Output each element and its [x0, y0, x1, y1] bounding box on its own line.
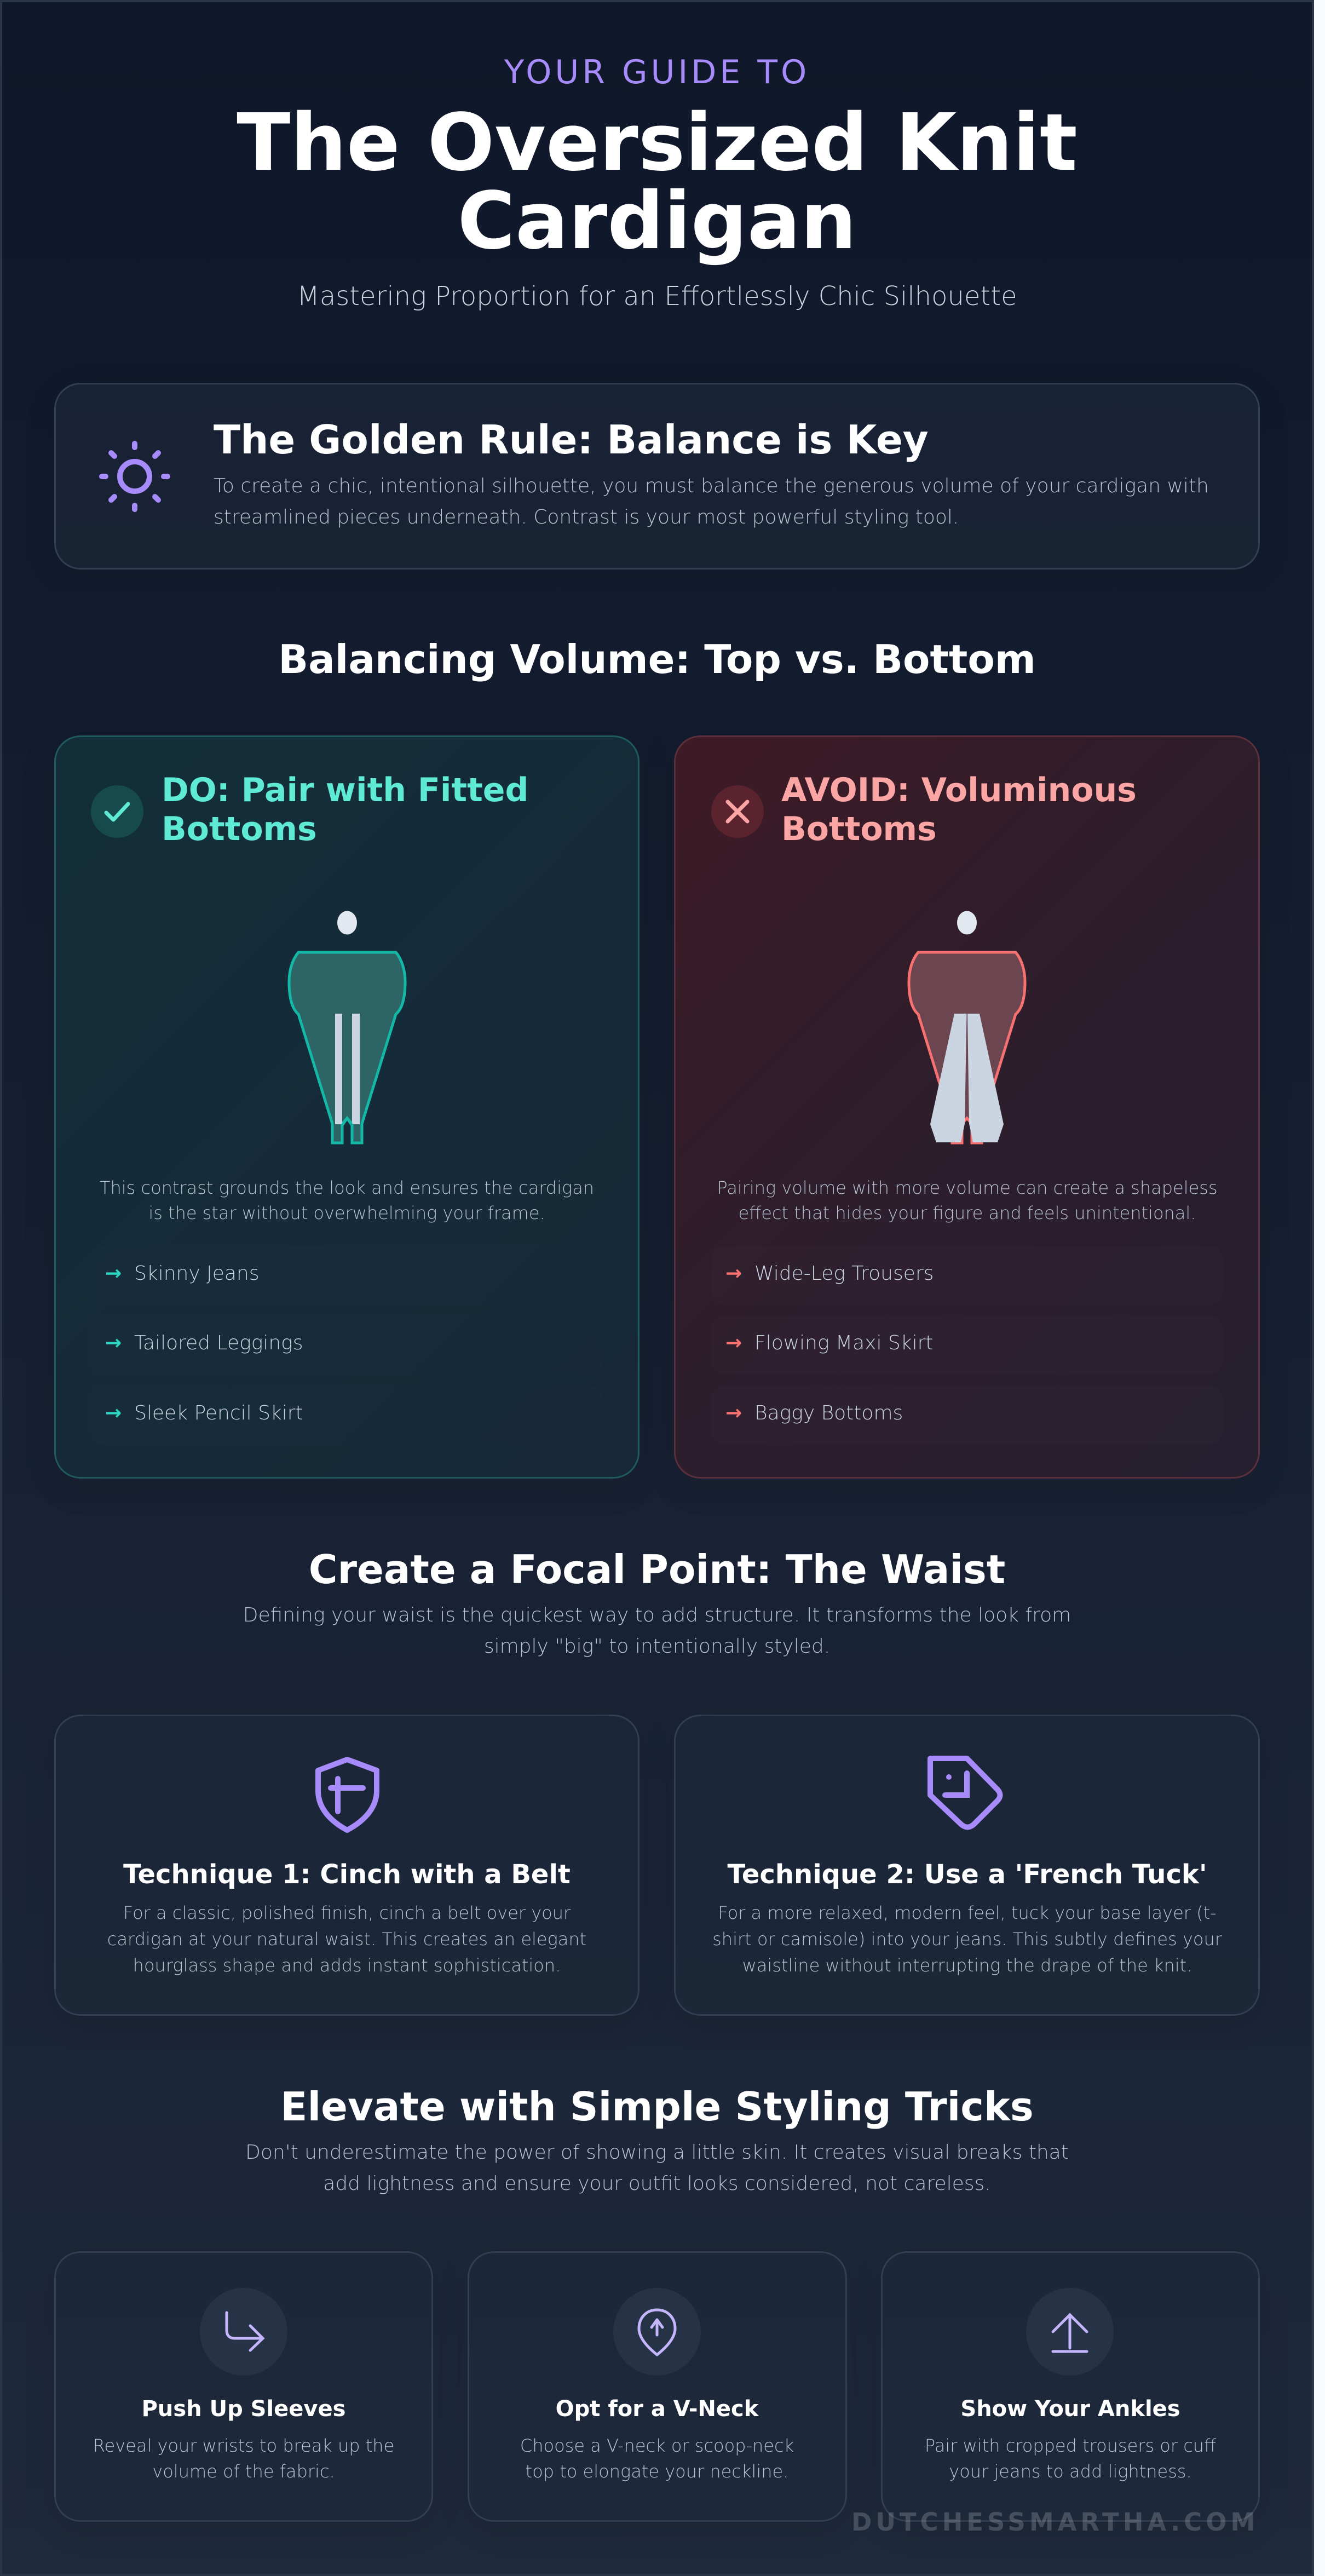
panel: do: [54, 735, 640, 1479]
golden rule text: streamlined pieces underneath. Contrast is your most powerful styling tool.: [214, 506, 959, 528]
technique 2 title: Technique 2: Use a 'French Tuck': [727, 1859, 1207, 1890]
item: tailored leggings: [91, 1315, 603, 1375]
push up sleeves text: Reveal your wrists to break up the: [93, 2435, 394, 2456]
golden rule text: To create a chic, intentional silhouette, you must balance the generous volume of your cardigan with: [214, 475, 1209, 497]
ankles text: Pair with cropped trousers or cuff: [925, 2435, 1216, 2456]
do description: [100, 1177, 594, 1223]
item: wide-leg trousers: Wide-Leg Trousers: [754, 1262, 934, 1285]
focal point text: Defining your waist is the quickest way to add structure. It transforms the look from: [243, 1604, 1071, 1626]
panel: ankles: [881, 2251, 1260, 2522]
item: tailored leggings: →: [105, 1332, 122, 1354]
heading: focal point: Create a Focal Point: The Waist: [309, 1546, 1005, 1592]
technique 2 text: [712, 1902, 1222, 1976]
do description: is the star without overwhelming your frame.: [148, 1203, 545, 1223]
item: skinny jeans: Skinny Jeans: [134, 1262, 259, 1285]
avoid heading: Bottoms: [781, 810, 937, 848]
item: sleek pencil skirt: [91, 1385, 603, 1445]
avoid list: [725, 1262, 934, 1424]
v-neck title: Opt for a V-Neck: [556, 2396, 758, 2422]
push up sleeves title: Push Up Sleeves: [142, 2396, 345, 2422]
ankles text: your jeans to add lightness.: [949, 2461, 1192, 2482]
do list: [105, 1262, 303, 1424]
styling tricks text: Don't underestimate the power of showing a little skin. It creates visual breaks that: [245, 2141, 1069, 2164]
watermark: DUTCHESSMARTHA.COM: [851, 2508, 1259, 2537]
item: baggy bottoms: →: [725, 1402, 742, 1424]
technique 1 text: hourglass shape and adds instant sophistication.: [133, 1955, 561, 1976]
item: baggy bottoms: [711, 1385, 1223, 1445]
panel: v-neck: [468, 2251, 847, 2522]
focal point text: simply "big" to intentionally styled.: [484, 1635, 830, 1658]
push up sleeves text: volume of the fabric.: [152, 2461, 335, 2482]
panel: avoid: [674, 735, 1260, 1479]
icon: sun: [99, 441, 170, 512]
technique 1 title: Technique 1: Cinch with a Belt: [123, 1859, 571, 1890]
figure: fitted bottoms: [288, 911, 406, 1145]
ankles text: [925, 2435, 1217, 2482]
item: wide-leg trousers: [711, 1246, 1223, 1305]
avoid heading: [781, 771, 1137, 848]
icon: up arrow: [1026, 2288, 1114, 2376]
item: tailored leggings: Tailored Leggings: [134, 1332, 303, 1354]
ankles title: Show Your Ankles: [960, 2396, 1180, 2422]
item: baggy bottoms: Baggy Bottoms: [754, 1402, 903, 1424]
heading: balancing volume: Balancing Volume: Top vs. Bottom: [278, 636, 1036, 682]
figure: voluminous bottoms: [908, 911, 1026, 1145]
header: [237, 53, 1078, 312]
panel: push up sleeves: [54, 2251, 433, 2522]
icon: pin arrow: [613, 2288, 701, 2376]
icon: cross: [711, 785, 764, 838]
item: skinny jeans: [91, 1246, 603, 1305]
do heading: Bottoms: [162, 810, 317, 848]
title: [237, 96, 1078, 267]
avoid description: effect that hides your figure and feels unintentional.: [739, 1203, 1196, 1223]
icon: tag: [928, 1756, 1003, 1830]
do description: This contrast grounds the look and ensures the cardigan: [100, 1177, 594, 1198]
golden rule text: [214, 475, 1209, 528]
item: skinny jeans: →: [105, 1262, 122, 1285]
item: flowing maxi skirt: [711, 1315, 1223, 1375]
technique 1 text: [107, 1902, 586, 1976]
title: Cardigan: [457, 175, 857, 267]
item: flowing maxi skirt: →: [725, 1332, 742, 1354]
technique 2 text: waistline without interrupting the drape of the knit.: [742, 1955, 1192, 1976]
golden rule heading: The Golden Rule: Balance is Key: [214, 417, 929, 463]
item: sleek pencil skirt: →: [105, 1402, 122, 1424]
item: sleek pencil skirt: Sleek Pencil Skirt: [134, 1402, 303, 1424]
v-neck text: [520, 2435, 794, 2482]
item: wide-leg trousers: →: [725, 1262, 742, 1285]
avoid heading: AVOID: Voluminous: [781, 771, 1137, 809]
panel: golden rule: [54, 383, 1260, 570]
panel: technique 2: [674, 1715, 1260, 2016]
push up sleeves text: [93, 2435, 394, 2482]
technique 2 text: For a more relaxed, modern feel, tuck your base layer (t-: [718, 1902, 1217, 1923]
focal point text: [243, 1604, 1071, 1658]
heading: styling tricks: Elevate with Simple Styling Tricks: [280, 2084, 1034, 2130]
v-neck text: Choose a V-neck or scoop-neck: [520, 2435, 794, 2456]
styling tricks text: [245, 2141, 1069, 2195]
title: The Oversized Knit: [237, 96, 1078, 188]
technique 1 text: For a classic, polished finish, cinch a belt over your: [123, 1902, 571, 1923]
icon: sleeves arrow: [200, 2288, 287, 2376]
eyebrow: your guide to: YOUR GUIDE TO: [504, 53, 810, 91]
item: flowing maxi skirt: Flowing Maxi Skirt: [754, 1332, 934, 1354]
styling tricks text: add lightness and ensure your outfit looks considered, not careless.: [323, 2172, 991, 2195]
v-neck text: top to elongate your neckline.: [526, 2461, 788, 2482]
avoid description: Pairing volume with more volume can create a shapeless: [717, 1177, 1218, 1198]
avoid description: [717, 1177, 1218, 1223]
do heading: [162, 771, 528, 848]
technique 2 text: shirt or camisole) into your jeans. This subtly defines your: [712, 1929, 1222, 1950]
icon: shield: [315, 1757, 379, 1833]
technique 1 text: cardigan at your natural waist. This creates an elegant: [107, 1929, 586, 1950]
panel: technique 1: [54, 1715, 640, 2016]
do heading: DO: Pair with Fitted: [162, 771, 528, 809]
icon: check: [91, 785, 143, 838]
subtitle: Mastering Proportion for an Effortlessly Chic Silhouette: [297, 281, 1017, 312]
